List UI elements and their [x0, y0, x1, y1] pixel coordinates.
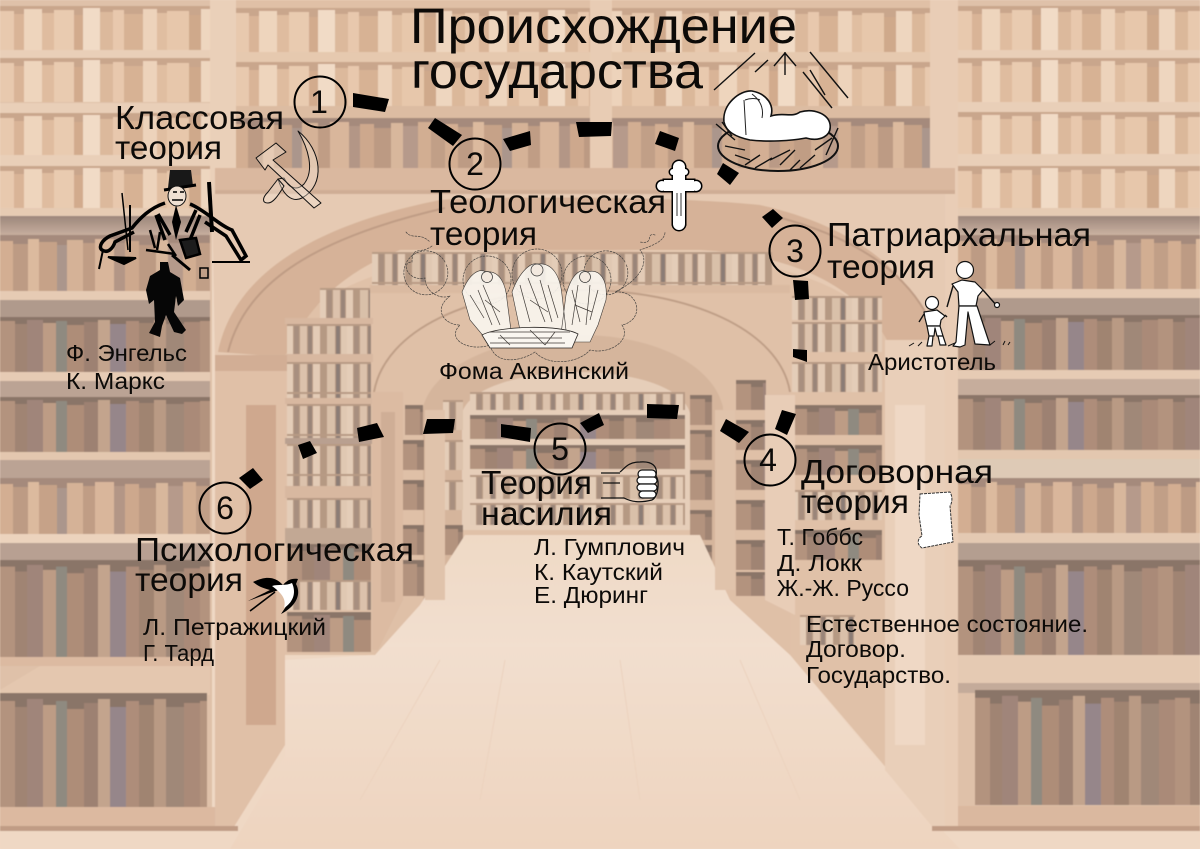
- text: authors of psychological theory: Л. Петражицкий: [143, 614, 326, 640]
- heading: class theory: Классовая: [115, 99, 284, 136]
- text: contract sequence: Естественное состояние.: [806, 611, 1088, 637]
- text: author of patriarchal theory: Аристотель: [868, 349, 996, 375]
- icon: scroll: [918, 492, 953, 548]
- text: authors of class theory: К. Маркс: [66, 368, 165, 394]
- text: authors of contract theory: Ж.-Ж. Руссо: [777, 575, 909, 601]
- icon: father and son: [909, 262, 1010, 347]
- number circle 3: [770, 226, 820, 276]
- text: contract sequence: [806, 611, 1088, 688]
- upper shelf row behind arch: [372, 252, 772, 285]
- heading: patriarchal theory: теория: [827, 248, 935, 285]
- heading: psychological theory: Психологическая: [135, 531, 414, 568]
- arches 2,3,4: [374, 290, 790, 655]
- number circle 2: [450, 138, 500, 190]
- step 5: violence theory: [481, 424, 685, 608]
- title: государства: [411, 43, 703, 99]
- text: authors of class theory: [66, 340, 187, 394]
- number circle 2: 2: [466, 146, 484, 182]
- floor: [230, 535, 960, 849]
- dashed path segments: [239, 93, 809, 489]
- text: authors of contract theory: Т. Гоббс: [777, 524, 863, 550]
- heading: psychological theory: теория: [135, 561, 243, 598]
- cornice: [215, 168, 955, 194]
- icon: capitalist figure: [99, 170, 250, 278]
- number circle 6: [200, 482, 250, 534]
- heading: class theory: [115, 99, 284, 166]
- text: author of theological theory: Фома Аквинский: [439, 358, 629, 384]
- right pier: [885, 340, 945, 830]
- text: authors of violence theory: Л. Гумплович: [534, 534, 685, 560]
- step 6: psychological theory: [135, 482, 414, 666]
- heading: contract theory: [801, 453, 993, 520]
- number circle 1: [294, 76, 346, 128]
- step 4: contract theory: [744, 434, 1088, 688]
- icon: worker silhouette: [146, 262, 186, 337]
- arch soffit: [218, 197, 935, 357]
- icon: fist: [601, 462, 658, 502]
- text: authors of violence theory: [534, 534, 685, 608]
- text: authors of contract theory: Д. Локк: [777, 550, 863, 576]
- icon: swallow: [248, 578, 298, 614]
- heading: theological theory: Теологическая: [430, 183, 666, 220]
- icon: hammer and sickle: [256, 131, 321, 208]
- text: contract sequence: Договор.: [806, 636, 906, 662]
- heading: violence theory: Теория: [481, 464, 592, 501]
- text: authors of violence theory: Е. Дюринг: [534, 582, 648, 608]
- heading: violence theory: [481, 464, 612, 532]
- left pier: [215, 360, 285, 830]
- upper central bookcase: [235, 0, 930, 172]
- spandrel under cornice: [212, 194, 945, 360]
- title: [410, 0, 797, 99]
- text: authors of violence theory: К. Каутский: [534, 559, 663, 585]
- text: authors of psychological theory: [143, 614, 326, 666]
- number circle 5: [534, 424, 586, 474]
- inner hall recess: [285, 250, 888, 770]
- text: authors of class theory: Ф. Энгельс: [66, 340, 187, 366]
- step 3: patriarchal theory: [770, 216, 1091, 375]
- text: authors of psychological theory: Г. Тард: [143, 640, 215, 666]
- heading: theological theory: [430, 183, 666, 252]
- number circle 5: 5: [551, 431, 569, 467]
- middle left pier: [372, 392, 403, 650]
- base plinths: [0, 826, 238, 831]
- text: authors of contract theory: [777, 524, 909, 601]
- text: contract sequence: Государство.: [806, 662, 951, 688]
- number circle 4: 4: [759, 442, 777, 478]
- icon: orthodox cross: [657, 161, 701, 230]
- icon: baby in nest with rays: [714, 52, 848, 171]
- heading: patriarchal theory: [827, 216, 1091, 285]
- left side shelves: [285, 288, 373, 652]
- heading: theological theory: теория: [430, 215, 537, 252]
- heading: contract theory: Договорная: [801, 453, 993, 490]
- number circle 6: 6: [216, 490, 234, 526]
- step 2: theological theory: [404, 52, 848, 384]
- heading: class theory: теория: [115, 129, 222, 166]
- number circle 3: 3: [786, 233, 804, 269]
- illustration: Trinity angels in clouds: [404, 232, 665, 362]
- left bookcase: [0, 0, 225, 831]
- heading: violence theory: насилия: [481, 495, 612, 532]
- heading: psychological theory: [135, 531, 414, 598]
- heading: contract theory: теория: [801, 483, 909, 520]
- number circle 4: [744, 434, 796, 486]
- heading: patriarchal theory: Патриархальная: [827, 216, 1091, 253]
- step 1: class theory: [66, 76, 346, 394]
- right bookcase: [955, 0, 1200, 830]
- pillars: [210, 0, 236, 200]
- right side shelves: [792, 296, 882, 645]
- number circle 1: 1: [310, 84, 328, 120]
- deep shelves: [378, 380, 766, 596]
